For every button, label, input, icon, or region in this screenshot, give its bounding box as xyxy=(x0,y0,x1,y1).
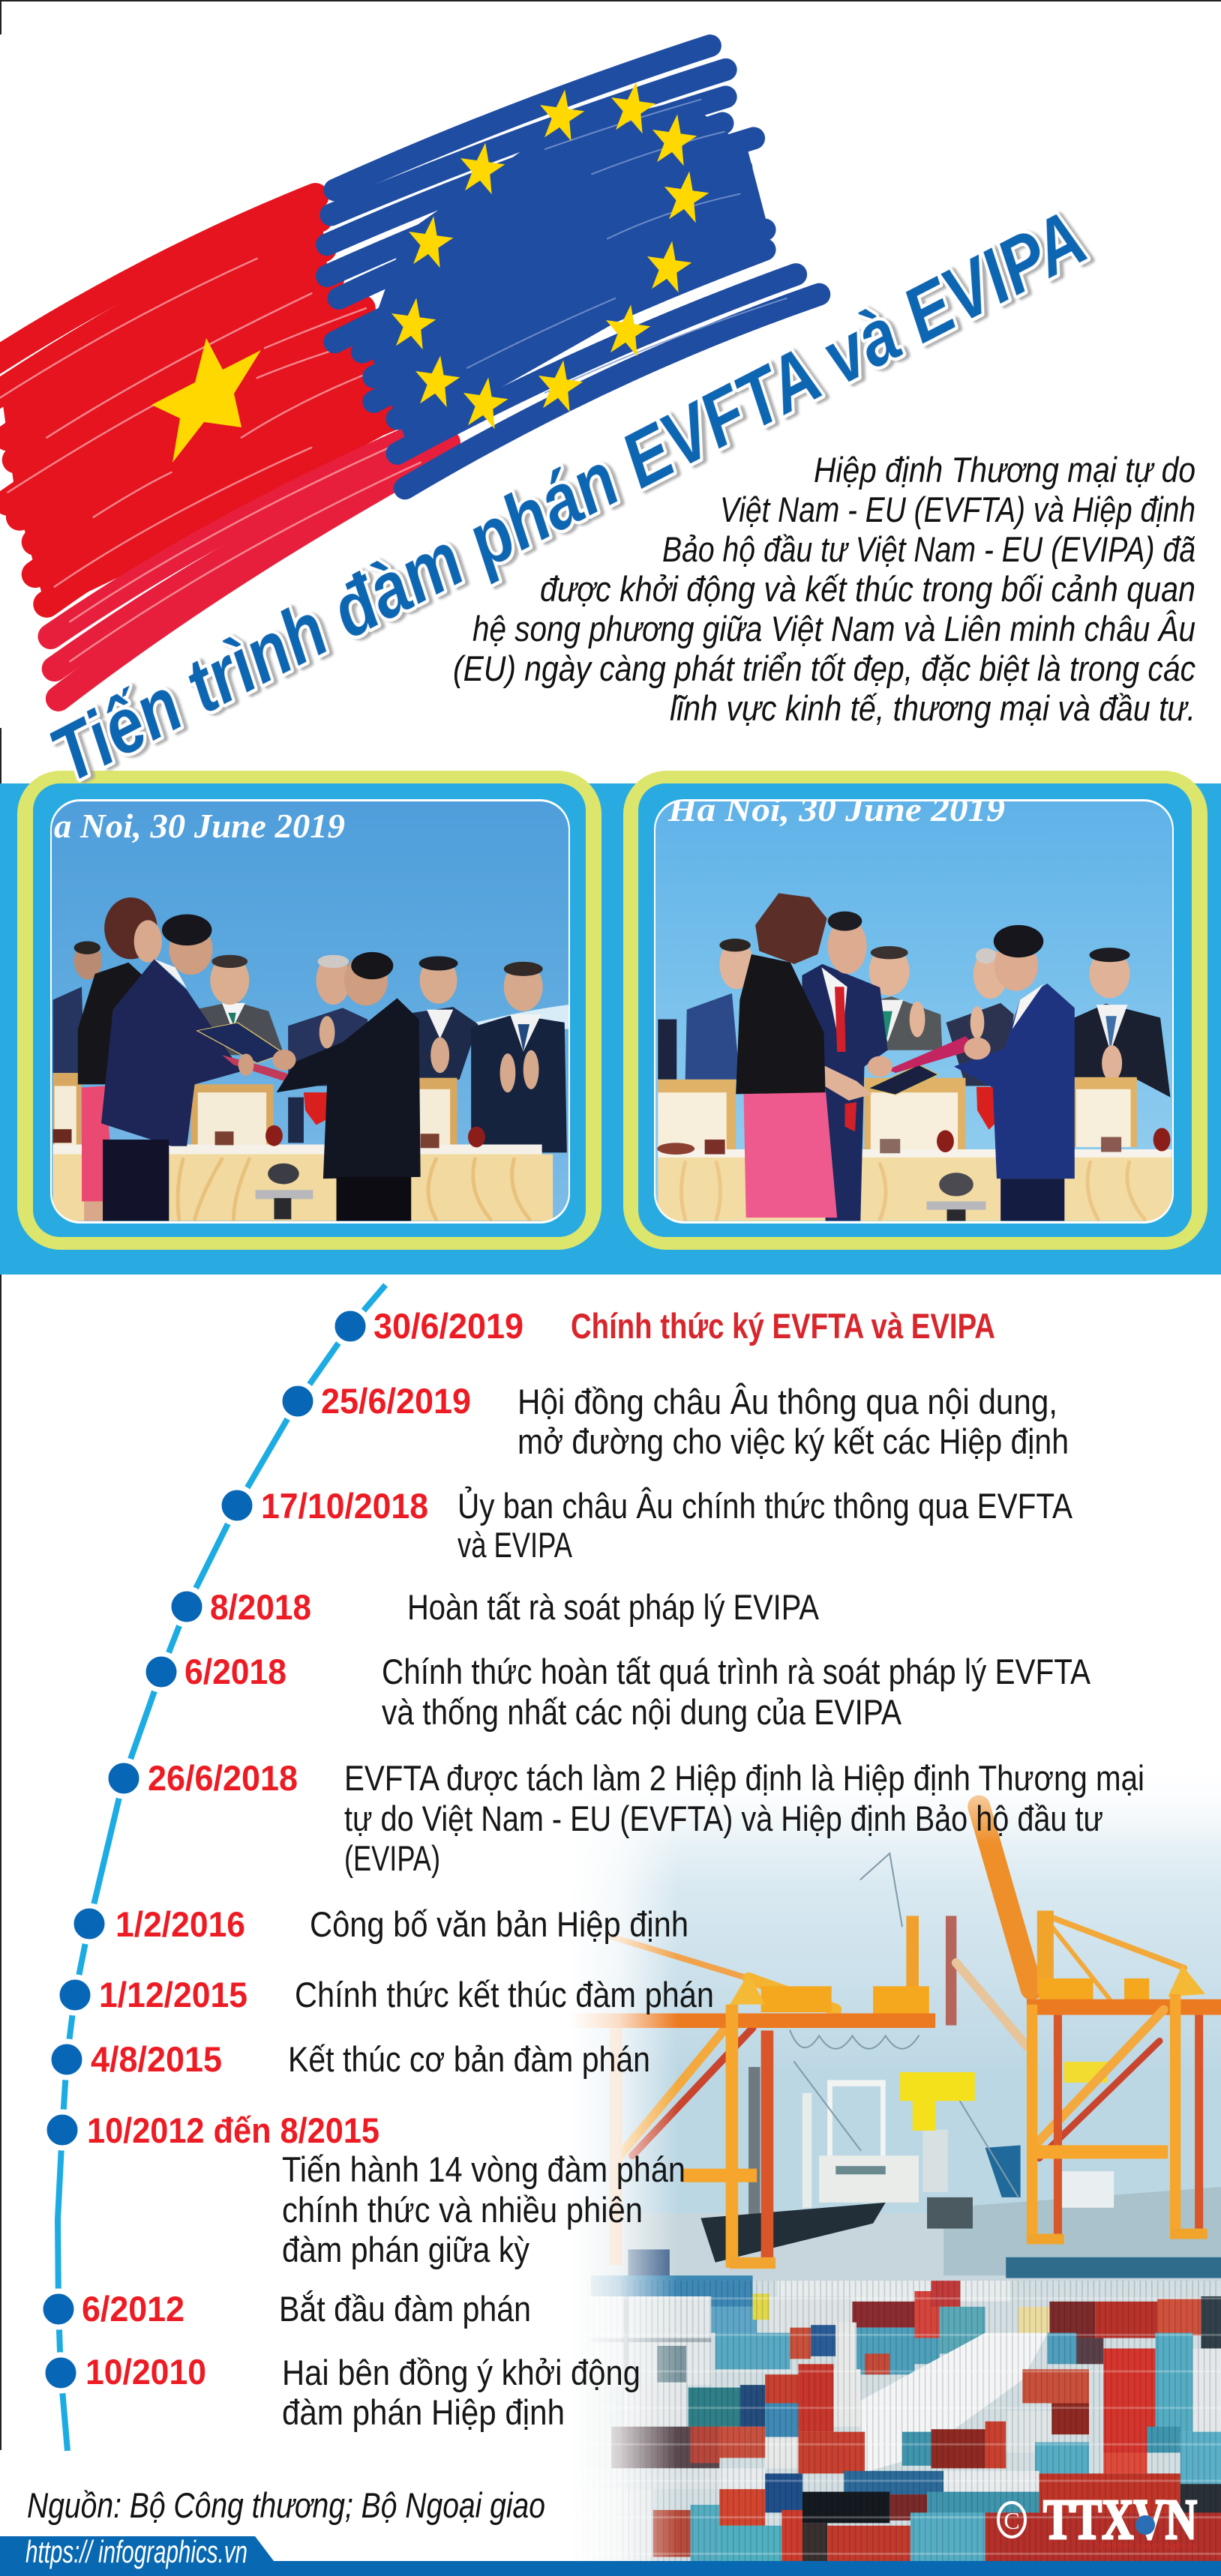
chairs xyxy=(53,1073,81,1146)
EU ring of stars xyxy=(387,79,712,430)
red brush strokes xyxy=(0,196,448,699)
timeline entry 10/2012 to 8/2015: 10/2012 đến 8/2015 xyxy=(87,2110,380,2150)
timeline curve xyxy=(58,1285,386,2451)
date text on screen, left photo: a Noi, 30 June 2019 xyxy=(54,807,345,845)
TTXVN logo: C xyxy=(1004,2507,1020,2534)
timeline entry 6/2012: 6/2012 xyxy=(82,2289,184,2329)
timeline entry 1/2/2016 xyxy=(116,1904,688,1944)
timeline dots xyxy=(40,1308,368,2391)
woman left xyxy=(82,1086,110,1201)
timeline entry 8/2018 xyxy=(210,1587,820,1627)
timeline entry 6/2018 xyxy=(184,1652,1091,1732)
timeline entry 8/2018: Hoàn tất rà soát pháp lý EVIPA xyxy=(407,1587,820,1627)
table items xyxy=(657,1143,694,1155)
ship xyxy=(700,2067,1114,2263)
port photo: cranes and containers xyxy=(578,1795,1221,2561)
timeline entry 4/8/2015: 4/8/2015 xyxy=(91,2039,222,2079)
timeline entry 10/2010 xyxy=(86,2352,640,2432)
ground xyxy=(570,2213,1221,2281)
photo frame left xyxy=(17,771,602,1250)
fades into white xyxy=(570,1754,678,2562)
timeline entry 6/2012 xyxy=(82,2289,531,2329)
timeline entry 17/10/2018: 17/10/2018 xyxy=(261,1486,428,1526)
folders xyxy=(197,1023,284,1063)
footer url tab xyxy=(0,2534,274,2576)
timeline entry 10/2010: 10/2010 xyxy=(86,2352,206,2392)
container yard xyxy=(570,2249,1221,2562)
timeline entry 26/6/2018: 26/6/2018 xyxy=(148,1758,298,1798)
yellow spreader xyxy=(900,2062,1108,2131)
timeline entry 17/10/2018: và EVIPA xyxy=(458,1525,572,1565)
timeline entry 30/6/2019: 30/6/2019 xyxy=(374,1306,524,1346)
timeline entry 10/2010: đàm phán Hiệp định xyxy=(282,2392,565,2432)
timeline entry 17/10/2018: Ủy ban châu Âu chính thức thông qua EVFTA xyxy=(458,1486,1073,1526)
timeline entry 1/12/2015: 1/12/2015 xyxy=(99,1975,248,2014)
timeline entry 8/2018: 8/2018 xyxy=(210,1587,311,1627)
timeline entry 4/8/2015: Kết thúc cơ bản đàm phán xyxy=(288,2039,650,2079)
timeline entry 6/2018: 6/2018 xyxy=(184,1652,286,1691)
TTXVN logo: Vietnam News Agency xyxy=(1097,2540,1197,2551)
small flag on table xyxy=(304,1092,329,1125)
photo band xyxy=(0,771,1221,1275)
table and drapes xyxy=(53,1145,542,1156)
back row xyxy=(658,1020,676,1080)
timeline entry 1/2/2016: Công bố văn bản Hiệp định xyxy=(310,1904,688,1944)
camera xyxy=(927,1201,986,1210)
crane cables xyxy=(790,1853,1018,2197)
woman xyxy=(744,1088,837,1218)
crane left xyxy=(570,1916,1027,2269)
intro paragraph xyxy=(453,450,1196,728)
folders xyxy=(868,1065,938,1095)
photo: signing ceremony left xyxy=(46,800,576,1223)
TTXVN logo xyxy=(998,2488,1197,2551)
photo frame right xyxy=(623,771,1208,1250)
timeline entry 30/6/2019: Chính thức ký EVFTA và EVIPA xyxy=(571,1306,995,1346)
timeline entry 10/2012 to 8/2015: Tiến hành 14 vòng đàm phán xyxy=(282,2149,686,2189)
timeline entry 6/2018: Chính thức hoàn tất quá trình rà soát pháp lý EVFTA xyxy=(382,1652,1091,1691)
timeline entry 25/6/2019: 25/6/2019 xyxy=(321,1381,471,1421)
timeline entry 10/2010: Hai bên đồng ý khởi động xyxy=(282,2353,640,2392)
chairs xyxy=(658,1080,736,1149)
timeline entry 6/2018: và thống nhất các nội dung của EVIPA xyxy=(382,1692,902,1732)
small flag xyxy=(976,1087,994,1130)
footer url tab: https:// infographics.vn xyxy=(26,2534,248,2569)
blue band xyxy=(0,783,1221,1275)
timeline entry 25/6/2019: mở đường cho việc ký kết các Hiệp định xyxy=(518,1421,1069,1461)
man right xyxy=(954,984,1075,1179)
man middle xyxy=(802,964,888,1221)
timeline entry 30/6/2019 xyxy=(374,1306,995,1346)
timeline entry 10/2012 to 8/2015: đàm phán giữa kỳ xyxy=(282,2230,530,2269)
timeline entry 1/12/2015 xyxy=(99,1975,714,2014)
Vietnam flag star xyxy=(152,338,261,463)
timeline entry 1/2/2016: 1/2/2016 xyxy=(116,1904,245,1944)
camera xyxy=(256,1190,313,1199)
timeline entry 26/6/2018: tự do Việt Nam - EU (EVFTA) và Hiệp định Bảo hộ đầu tư xyxy=(344,1799,1103,1838)
footer bar xyxy=(0,2561,1221,2576)
photo: signing ceremony right xyxy=(654,790,1184,1223)
timeline entry 6/2012: Bắt đầu đàm phán xyxy=(279,2289,531,2329)
timeline entry 17/10/2018 xyxy=(261,1486,1073,1565)
crane right xyxy=(979,1807,1221,2244)
timeline entry 26/6/2018: (EVIPA) xyxy=(344,1838,440,1878)
table items xyxy=(266,1125,283,1146)
blue brush strokes xyxy=(327,46,819,488)
date text on screen, right photo: Ha Noi, 30 June 2019 xyxy=(668,790,1005,828)
timeline entry 25/6/2019 xyxy=(321,1381,1069,1461)
timeline entry 4/8/2015 xyxy=(91,2039,650,2079)
source line: Nguồn: Bộ Công thương; Bộ Ngoại giao xyxy=(27,2485,545,2525)
timeline entry 10/2012 to 8/2015 xyxy=(87,2110,686,2269)
timeline entry 26/6/2018 xyxy=(148,1758,1144,1878)
timeline entry 10/2012 to 8/2015: chính thức và nhiều phiên xyxy=(282,2190,643,2230)
man left, navy suit xyxy=(101,959,242,1146)
timeline entry 25/6/2019: Hội đồng châu Âu thông qua nội dung, xyxy=(518,1382,1058,1421)
man right, dark suit xyxy=(277,998,421,1179)
table and drapes xyxy=(658,1149,1172,1159)
back row xyxy=(53,987,84,1073)
timeline entry 1/12/2015: Chính thức kết thúc đàm phán xyxy=(295,1975,714,2014)
